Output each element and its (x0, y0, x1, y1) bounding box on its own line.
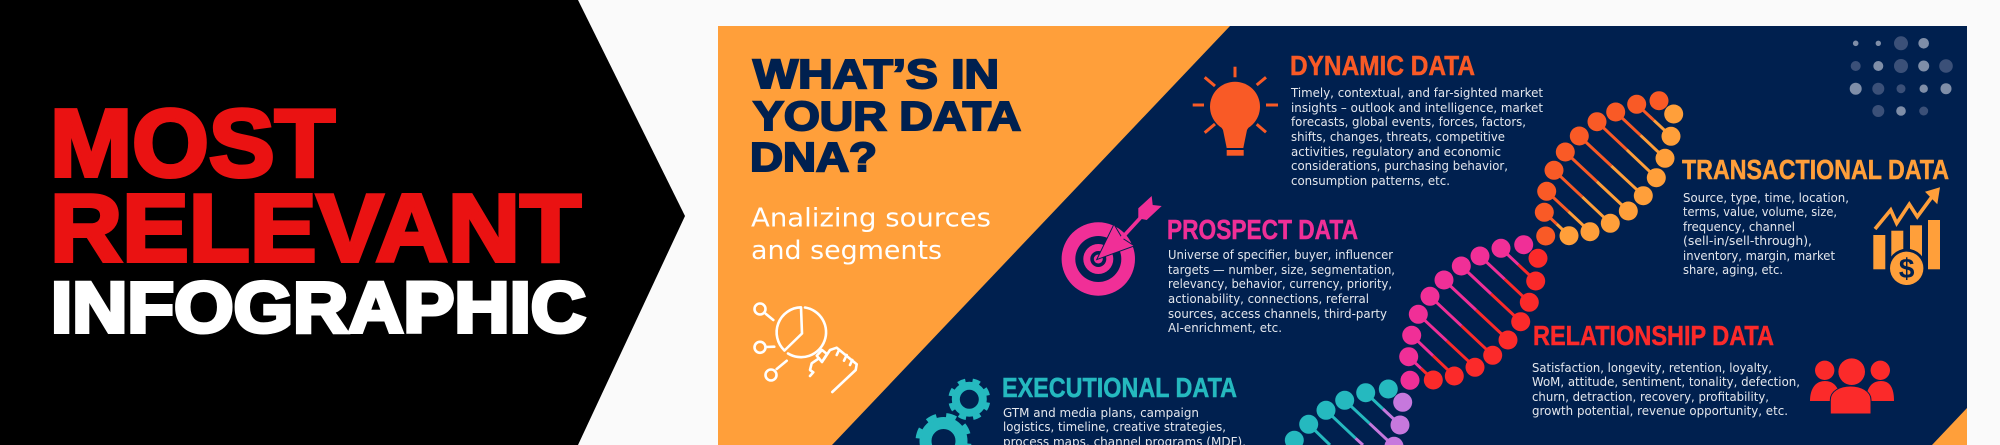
prospect data block: sources, access channels, third-party (1168, 306, 1387, 321)
icon: group of people (1810, 358, 1894, 414)
banner title: MOST (50, 90, 335, 197)
banner title: INFOGRAPHIC (51, 269, 586, 348)
executional data block: EXECUTIONAL DATA (1002, 372, 1237, 403)
dynamic data block: Timely, contextual, and far-sighted market (1290, 85, 1543, 100)
panel: data DNA (718, 26, 1967, 445)
icon: analytics magnifier and hand (754, 304, 857, 392)
transactional data block (1682, 154, 1949, 277)
transactional data block: TRANSACTIONAL DATA (1682, 154, 1949, 185)
heading: what's in your data DNA (750, 51, 1021, 180)
banner title: RELEVANT (50, 175, 581, 282)
DNA helix: orange segment (1535, 91, 1683, 246)
dynamic data block: forecasts, global events, forces, factors, (1291, 114, 1526, 129)
subtitle: Analizing sources (751, 204, 991, 234)
prospect data block: Universe of specifier, buyer, influencer (1168, 247, 1394, 262)
icon: target with arrow (1062, 196, 1162, 296)
heading: what's in your data DNA: WHAT’S IN (753, 51, 999, 97)
dynamic data block: activities, regulatory and economic (1291, 144, 1501, 159)
prospect data block: actionability, connections, referral (1168, 291, 1369, 306)
transactional data block: terms, value, volume, size, (1683, 204, 1837, 219)
prospect data block: relevancy, behavior, currency, priority, (1168, 276, 1392, 291)
dynamic data block: insights – outlook and intelligence, market (1291, 100, 1543, 115)
heading: what's in your data DNA: DNA? (750, 134, 877, 180)
dynamic data block: considerations, purchasing behavior, (1291, 158, 1508, 173)
prospect data block: targets — number, size, segmentation, (1168, 262, 1395, 277)
transactional data block: inventory, margin, market (1683, 248, 1835, 263)
relationship data block (1532, 320, 1800, 418)
DNA helix: teal and purple segment (1285, 380, 1412, 445)
prospect data block: PROSPECT DATA (1167, 214, 1358, 245)
transactional data block: frequency, channel (1683, 219, 1795, 234)
relationship data block: Satisfaction, longevity, retention, loyalty, (1532, 360, 1772, 375)
executional data block (1002, 372, 1246, 445)
icon: light bulb (1193, 67, 1278, 156)
relationship data block: WoM, attitude, sentiment, tonality, defection, (1532, 374, 1800, 389)
executional data block: GTM and media plans, campaign (1003, 405, 1199, 420)
black arrow banner (0, 0, 685, 445)
dynamic data block: DYNAMIC DATA (1290, 50, 1475, 81)
banner title (50, 90, 586, 348)
transactional data block: Source, type, time, location, (1683, 190, 1849, 205)
relationship data block: growth potential, revenue opportunity, etc. (1532, 403, 1788, 418)
orange triangle panel (718, 26, 1230, 445)
executional data block: logistics, timeline, creative strategies, (1003, 419, 1226, 434)
orange corner (1932, 408, 1967, 445)
DNA helix: pink and red segment (1399, 235, 1548, 390)
transactional data block: share, aging, etc. (1683, 262, 1783, 277)
relationship data block: churn, detraction, recovery, profitability, (1532, 389, 1769, 404)
decorative dot grid (1850, 36, 1953, 117)
heading: what's in your data DNA: YOUR DATA (753, 93, 1021, 139)
subtitle (751, 204, 991, 266)
dynamic data block: shifts, changes, threats, competitive (1291, 129, 1505, 144)
dynamic data block: consumption patterns, etc. (1291, 173, 1450, 188)
prospect data block (1167, 214, 1395, 335)
subtitle: and segments (751, 236, 942, 266)
icon: growth chart and dollar coin (1873, 187, 1940, 288)
icon: growth chart and dollar coin: $ (1899, 253, 1915, 284)
transactional data block: (sell-in/sell-through), (1683, 233, 1812, 248)
dynamic data block (1290, 50, 1543, 188)
icon: gears (916, 378, 991, 445)
relationship data block: RELATIONSHIP DATA (1533, 320, 1774, 351)
prospect data block: AI-enrichment, etc. (1168, 320, 1282, 335)
